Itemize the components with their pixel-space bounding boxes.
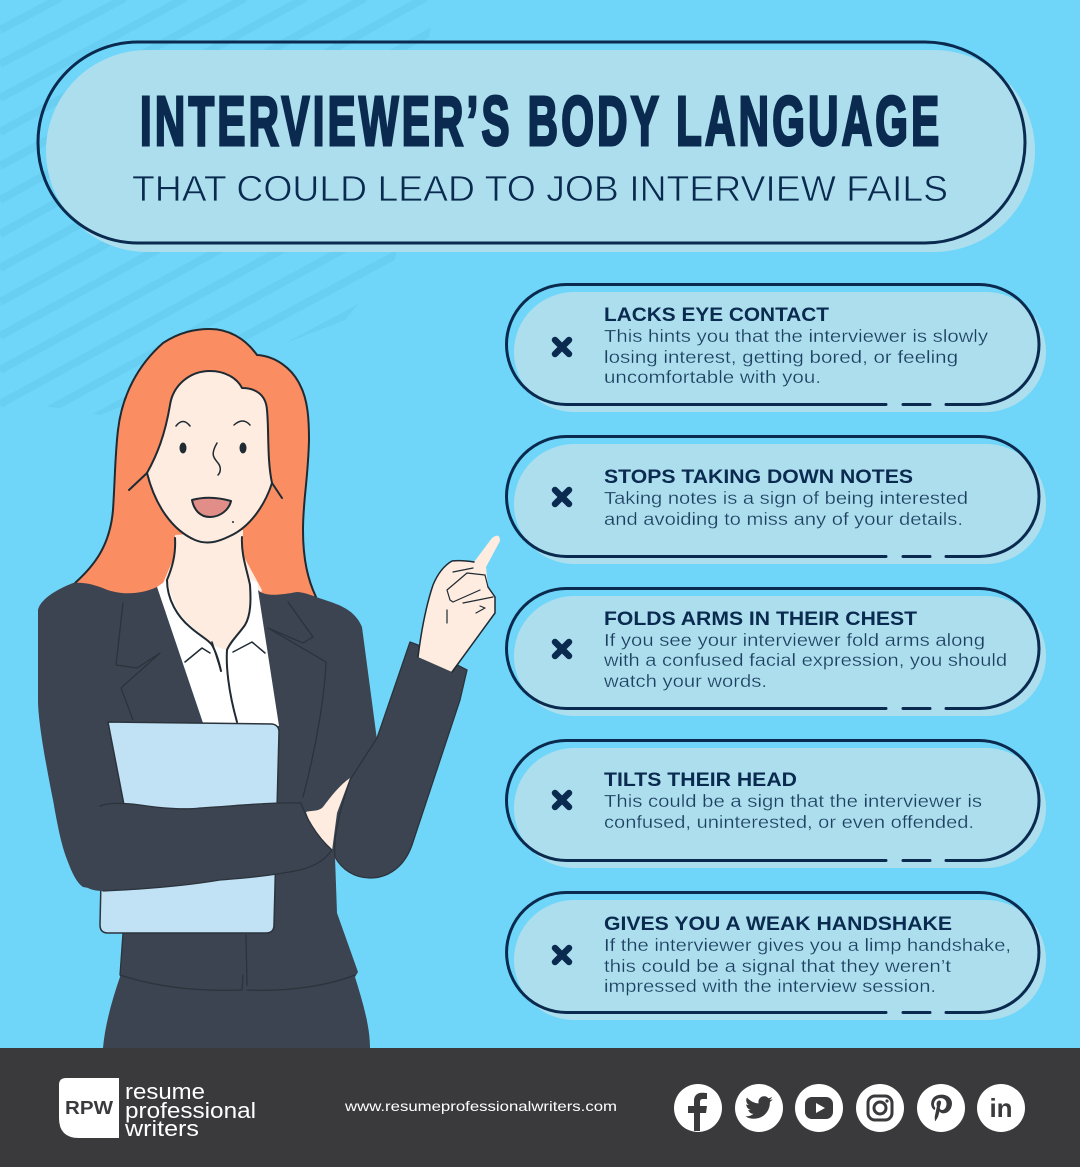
text: tilts their head [604,770,982,832]
text: weak handshake: this could be a signal that they weren’t [604,956,951,976]
card 1: lacks eye contact [507,284,1046,412]
card 3: folds arms [507,588,1046,716]
character illustration [38,329,500,1048]
icon: twitter [735,1084,783,1132]
footer [0,1048,1080,1167]
text: tilts their head: This could be a sign that the interviewer is [604,791,982,811]
icon: youtube [795,1084,843,1132]
icon: cross [555,490,569,504]
nose [213,443,220,475]
icon: instagram [856,1084,904,1132]
logo: writers [124,1116,199,1141]
jacket lapel details [116,602,355,990]
text: stops taking down notes: and avoiding to miss any of your details. [604,509,963,529]
logo: professional [125,1098,256,1123]
text: weak handshake: impressed with the interview session. [604,976,936,996]
text: lacks eye contact: uncomfortable with you. [604,367,821,387]
text: weak handshake: GIVES YOU A WEAK HANDSHAKE [604,914,952,935]
shirt [157,580,282,726]
card 2: stops taking down notes [507,436,1046,564]
icon: linkedin: in [989,1093,1013,1123]
icon: cross [555,340,569,354]
text: lacks eye contact: LACKS EYE CONTACT [604,305,829,326]
folder [100,722,279,933]
jacket [38,583,377,1048]
heading: INTERVIEWER’S BODY LANGUAGE [140,83,939,161]
card 5: weak handshake [507,892,1046,1020]
eyes and brows [176,421,250,454]
icon: pinterest [917,1084,965,1132]
hair [75,329,316,620]
text: tilts their head: confused, uninterested, or even offended. [604,812,974,832]
raised arm [335,642,467,878]
logo: resume [125,1079,205,1104]
icon: linkedin [977,1084,1025,1132]
icon: cross [555,793,569,807]
text: stops taking down notes: STOPS TAKING DOWN NOTES [604,467,913,488]
text: stops taking down notes [604,467,968,529]
folded forearm [54,803,332,891]
text: lacks eye contact: This hints you that the interviewer is slowly [604,326,988,346]
text: lacks eye contact [604,305,988,387]
text: folds arms: with a confused facial expression, you should [603,650,1007,670]
shirt collar [185,642,265,671]
text: weak handshake [604,914,1011,996]
neck and chest [160,530,262,690]
subtitle: THAT COULD LEAD TO JOB INTERVIEW FAILS [132,168,948,209]
website url: www.resumeprofessionalwriters.com [344,1098,617,1114]
title panel [38,42,1035,252]
icon: cross [555,948,569,962]
face [147,371,272,543]
text: folds arms: FOLDS ARMS IN THEIR CHEST [604,609,917,630]
text: weak handshake: If the interviewer gives you a limp handshake, [604,935,1011,955]
card 4: tilts their head [507,740,1046,868]
hand under arm [306,778,350,851]
logo [59,1078,256,1141]
icon: facebook [674,1084,722,1132]
icon: cross [555,642,569,656]
mouth [192,498,231,517]
logo: RPW [65,1098,113,1118]
text: lacks eye contact: losing interest, getting bored, or feeling [604,347,958,367]
text: folds arms: watch your words. [603,671,767,691]
text: stops taking down notes: Taking notes is a sign of being interested [604,488,968,508]
raised hand [418,536,500,672]
text: folds arms [603,609,1007,691]
text: tilts their head: TILTS THEIR HEAD [604,770,797,791]
text: folds arms: If you see your interviewer fold arms along [604,630,985,650]
